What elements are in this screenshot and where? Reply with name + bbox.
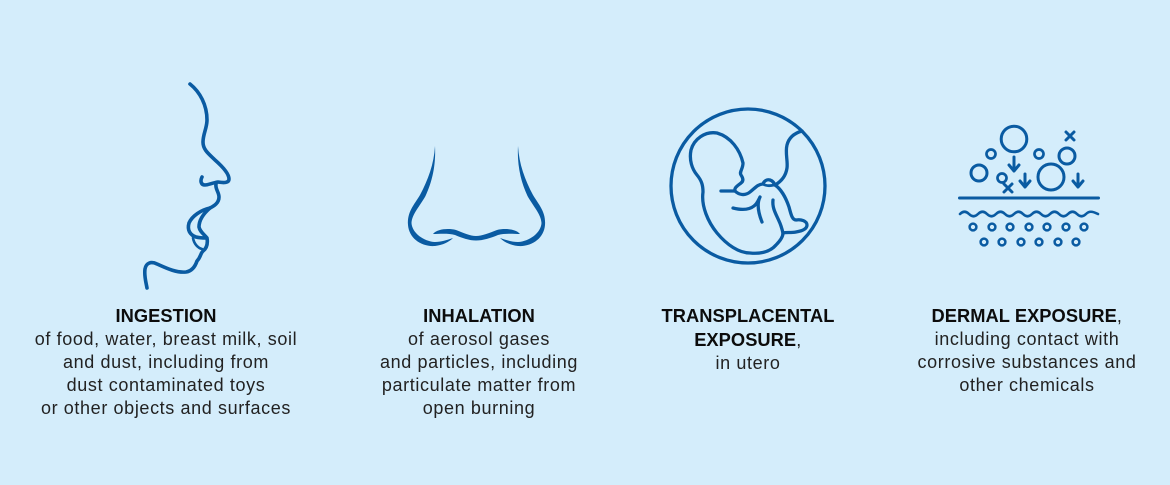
text: inhalation: particulate matter from: [382, 375, 576, 395]
text: inhalation: [380, 305, 578, 418]
text: ingestion: dust contaminated toys: [67, 375, 265, 395]
text: inhalation: open burning: [423, 398, 535, 418]
icon: fetus in circle: [671, 109, 825, 263]
text: dermal exposure: [918, 305, 1136, 395]
text: dermal exposure: corrosive substances and: [918, 352, 1136, 372]
text: inhalation: of aerosol gases: [408, 329, 550, 349]
text: inhalation: and particles, including: [380, 352, 578, 372]
text: ingestion: of food, water, breast milk, soil: [35, 329, 297, 349]
text: transplacental exposure: TRANSPLACENTAL: [661, 305, 834, 326]
text: ingestion: INGESTION: [115, 305, 216, 326]
text: transplacental exposure: in utero: [716, 353, 780, 373]
icon: nose: [408, 146, 545, 246]
text: dermal exposure: DERMAL EXPOSURE,: [932, 305, 1122, 326]
text: dermal exposure: other chemicals: [959, 375, 1095, 395]
text: transplacental exposure: EXPOSURE,: [694, 329, 802, 350]
icon: dermal exposure: [960, 126, 1098, 245]
text: transplacental exposure: [661, 305, 834, 373]
text: ingestion: or other objects and surfaces: [41, 398, 291, 418]
text: ingestion: and dust, including from: [63, 352, 269, 372]
text: inhalation: INHALATION: [423, 305, 535, 326]
icon: face profile: [145, 84, 229, 288]
text: ingestion: [35, 305, 297, 418]
text: dermal exposure: including contact with: [935, 329, 1119, 349]
